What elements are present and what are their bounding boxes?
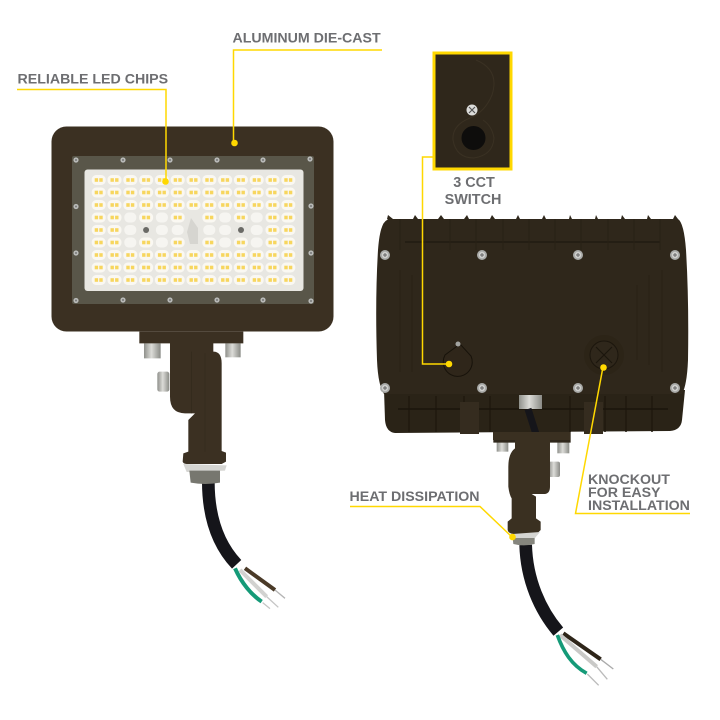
callout: reliable LED chips xyxy=(17,72,169,185)
dot: reliable LED chips xyxy=(162,178,169,185)
label: aluminum die-cast: ALUMINUM DIE-CAST xyxy=(232,30,381,46)
inset contours xyxy=(453,60,494,158)
dot: aluminum die-cast xyxy=(231,140,238,146)
callout: knockout xyxy=(576,364,690,514)
rear housing blocks xyxy=(460,402,603,434)
dot: 3 CCT switch xyxy=(446,361,452,367)
LED panel xyxy=(84,170,304,291)
label: 3 CCT switch: 3 CCT xyxy=(453,175,495,191)
inset background xyxy=(434,53,511,169)
switch close-up xyxy=(434,53,511,169)
dot: heat dissipation xyxy=(509,534,516,540)
leader line: aluminum die-cast xyxy=(234,50,382,143)
front cable and wires xyxy=(208,482,285,609)
lens glass xyxy=(72,156,314,304)
callout: 3 CCT switch xyxy=(422,53,511,367)
callout: heat dissipation xyxy=(350,489,516,540)
rear housing xyxy=(376,219,688,394)
rear fins lower xyxy=(384,390,685,433)
leader line: 3 CCT switch xyxy=(422,157,449,364)
label: knockout for easy installation: FOR EASY xyxy=(588,485,661,501)
lens screws xyxy=(73,156,314,304)
label: knockout for easy installation: INSTALLATION xyxy=(588,498,690,514)
label: heat dissipation: HEAT DISSIPATION xyxy=(350,489,480,505)
front housing xyxy=(52,126,334,332)
leader line: reliable LED chips xyxy=(17,90,166,181)
leader line: knockout xyxy=(576,367,690,514)
rear view flood light xyxy=(376,215,688,685)
label second line: switch: SWITCH xyxy=(445,192,501,208)
rear mount plate xyxy=(493,432,570,440)
label: knockout for easy installation: KNOCKOUT xyxy=(588,472,670,488)
leader line: heat dissipation xyxy=(350,506,512,537)
inset screw xyxy=(466,104,478,116)
switch cover xyxy=(443,342,472,376)
rear screws xyxy=(380,250,680,393)
front mounting arm xyxy=(139,332,243,484)
inset switch hole xyxy=(462,126,486,150)
top fins xyxy=(387,215,678,219)
knockout xyxy=(584,335,624,375)
wire connector xyxy=(519,395,542,434)
rear cable and wires xyxy=(526,545,613,685)
rear mounting arm xyxy=(493,430,571,545)
front view flood light xyxy=(52,126,334,609)
LED chip grid xyxy=(92,175,295,285)
callout: aluminum die-cast xyxy=(231,30,382,146)
dot: knockout xyxy=(600,364,607,371)
label: reliable LED chips: RELIABLE LED CHIPS xyxy=(18,72,168,88)
